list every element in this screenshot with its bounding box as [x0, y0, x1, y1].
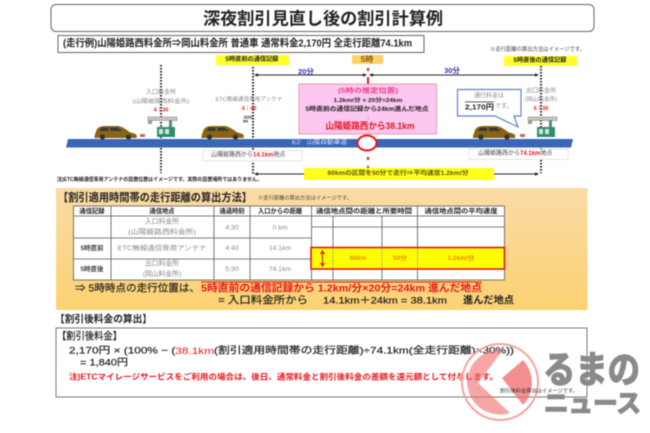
text: entrance toll: (山陽姫路西料金所)	[132, 97, 190, 105]
callout: estimated position at 5 o'clock: (5時の推定位置)	[338, 86, 398, 94]
label: 74.1km point: 山陽姫路西から74.1km地点	[478, 149, 552, 157]
icon: ETC antenna	[243, 116, 252, 122]
row: entrance	[128, 216, 288, 236]
text: entrance toll	[132, 88, 190, 114]
panel: calculation method	[56, 188, 588, 310]
highlighted row: 50分	[393, 253, 407, 262]
label: 14.1km point: 山陽姫路西から14.1km地点	[211, 150, 285, 158]
arrow: 30 minutes	[369, 65, 539, 77]
highlighted row	[311, 248, 504, 269]
note: image of calculation: 割引後料金算出はイメージです。	[500, 386, 578, 394]
text: entrance toll: 4：30	[154, 106, 168, 114]
highlighted row: 60km	[350, 255, 367, 262]
callout: estimated position at 5 o'clock: 山陽姫路西から38.1km	[326, 120, 414, 131]
highlighted row: 1.2km/分	[448, 253, 475, 262]
label: record before 5 o'clock	[216, 55, 289, 65]
row: after 5 o'clock: 5:30	[225, 266, 239, 273]
callout: estimated position at 5 o'clock: 1.2km/分 × 20分=24km	[334, 96, 403, 104]
note: ※走行距離の算出方法はイメージです。	[258, 194, 352, 202]
callout: estimated position at 5 o'clock	[299, 84, 436, 134]
road label: E2 山陽自動車道	[292, 138, 348, 146]
heading: discounted toll calculation: 【割引後料金の算出】	[55, 312, 152, 326]
icon: double arrow	[320, 251, 324, 266]
label: 14.1km point	[203, 150, 302, 161]
panel heading: 【割引後料金】	[57, 330, 122, 342]
text: ETC antenna	[216, 95, 283, 112]
table header: 通信記録	[79, 206, 105, 215]
label: record after 5 o'clock	[504, 56, 577, 66]
text: entrance toll: 入口料金所	[146, 88, 176, 96]
row: before 5 o'clock: 5時直前	[80, 243, 104, 252]
panel: road diagram	[57, 45, 585, 183]
note: image only: ※走行距離の算出方法はイメージです。	[490, 45, 585, 53]
result: = 1,840円	[80, 358, 128, 368]
dotted markers	[161, 65, 541, 175]
row: before 5 o'clock: ETC無線通信専用アンテナ	[118, 243, 206, 252]
label: 5 o'clock: 5時	[361, 54, 373, 64]
icon: car at entrance	[94, 126, 137, 140]
label: 74.1km point	[469, 149, 568, 160]
table header: 通信地点	[149, 206, 175, 215]
callout: toll 2,170 yen: 通行料金は	[474, 92, 504, 100]
callout: estimated position at 5 o'clock: 5時直前の通信記録から24km進んだ地点	[306, 105, 428, 113]
callout: toll 2,170 yen: です。	[495, 103, 512, 110]
formula: 2,170円 × (100% − ( 38.1km (割引適用時間帯の走行距離)÷74.1km(全走行距離)×30%))	[69, 344, 514, 356]
calculation line 2: = 入口料金所から	[218, 294, 308, 306]
calculation line 1	[75, 282, 482, 294]
logo: kuruma no news	[462, 344, 641, 420]
text: ETC antenna: ETC無線通信専用アンテナ	[216, 95, 283, 103]
arrow: 50 minute section with average speed	[254, 168, 539, 180]
title	[51, 4, 594, 32]
row: entrance: 0 km	[273, 224, 288, 232]
icon: car at antenna	[202, 126, 244, 140]
marker: red circle on road	[358, 136, 376, 150]
calculation line 2	[218, 294, 514, 306]
row: after 5 o'clock	[80, 258, 291, 278]
arrow: 20 minutes: 20分	[298, 66, 314, 76]
row: before 5 o'clock	[80, 243, 291, 252]
label: record after 5 o'clock: 5時直後の通信記録	[514, 56, 566, 64]
logo: kuruma no news: ニュース	[544, 390, 641, 418]
icon: exit toll booth	[520, 117, 557, 137]
calculation line 1: ⇒ 5時時点の走行位置は、	[75, 282, 200, 294]
arrow: 50 minute section with average speed: 60kmの区間を50分で走行⇒平均速度1.2km/分	[328, 169, 468, 177]
icon: entrance toll booth	[140, 117, 177, 137]
road	[66, 139, 573, 148]
table header: 通過時刻	[219, 206, 245, 215]
text: exit toll: 5：30	[534, 105, 548, 112]
row: entrance: (山陽姫路西料金所)	[128, 227, 196, 236]
arrow: 20 minutes	[254, 66, 367, 77]
icon: car at exit	[473, 126, 515, 140]
row: after 5 o'clock: 出口料金所	[145, 258, 179, 268]
footnote: 注)ETC無線通信専用アンテナの設置位置はイメージです。実際の設置場所ではありません。	[57, 175, 262, 183]
logo mark	[462, 344, 538, 420]
calculation line 2: 14.1km＋24km = 38.1km	[323, 296, 447, 306]
row: after 5 o'clock: 74.1km	[269, 266, 291, 273]
row: entrance: 4:30	[225, 224, 239, 232]
callout: toll 2,170 yen	[458, 90, 521, 127]
calculation line 1: 5時直前の通信記録から 1.2km/分×20分=24km 進んだ地点	[201, 282, 482, 294]
callout: estimated position at 5 o'clock: ↓	[367, 115, 369, 120]
text: exit toll: (岡山料金所)	[525, 95, 557, 103]
row: after 5 o'clock: (岡山料金所)	[143, 269, 181, 278]
table header: 通信地点間の平均速度	[424, 206, 498, 215]
row: before 5 o'clock: 4:40	[225, 245, 239, 252]
arrow: 30 minutes: 30分	[444, 65, 460, 75]
text: ETC antenna: 4：40	[242, 105, 256, 112]
row: entrance: 入口料金所	[145, 216, 179, 226]
route example heading: (走行例)山陽姫路西料金所⇒岡山料金所 普通車 通常料金2,170円 全走行距離74.1km	[63, 36, 412, 50]
table header: 通信地点間の距離と所要時間	[316, 206, 412, 215]
text: exit toll: 出口料金所	[526, 86, 556, 94]
callout: toll 2,170 yen: 2,170円	[465, 102, 494, 112]
heading: 【割引適用時間帯の走行距離の算出方法】	[58, 190, 252, 204]
text: exit toll	[525, 86, 557, 112]
label: record before 5 o'clock: 5時直前の通信記録	[226, 55, 278, 63]
label: 5 o'clock	[352, 54, 383, 64]
row: before 5 o'clock: 14.1km	[269, 245, 291, 252]
title: 深夜割引見直し後の割引計算例	[203, 8, 443, 28]
table header	[79, 206, 498, 215]
panel: discounted toll	[56, 328, 587, 397]
note in red: 注)ETCマイレージサービスをご利用の場合は、後日、通常料金と割引後料金の差額を還元額として付与します。	[69, 372, 498, 382]
calculation line 2: 進んだ地点	[463, 294, 514, 306]
route example heading	[58, 36, 424, 52]
table	[74, 206, 504, 280]
table header: 入口からの距離	[258, 206, 303, 215]
row: after 5 o'clock: 5時直後	[80, 264, 104, 273]
red 5 o'clock markers	[367, 68, 369, 169]
